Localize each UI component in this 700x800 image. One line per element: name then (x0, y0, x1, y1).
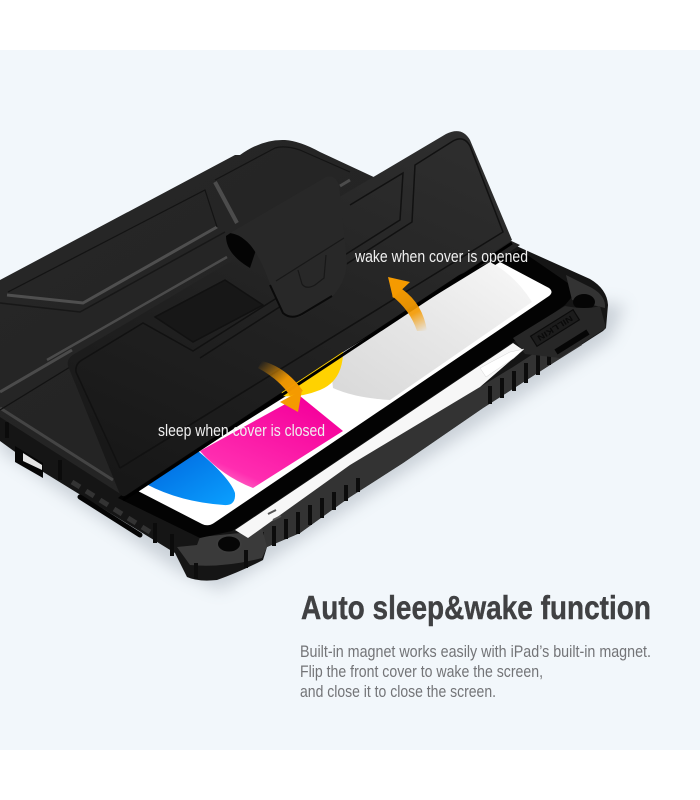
pencil bay (235, 343, 523, 538)
magenta wallpaper shape (200, 396, 343, 488)
wake arrow head (388, 277, 410, 298)
bumper corner ribs (196, 550, 246, 579)
front flap cover (68, 131, 512, 496)
back cover grooves (0, 147, 350, 480)
sleep arrow head (280, 390, 302, 412)
bumper corner, bottom (177, 528, 267, 566)
description text: Flip the front cover to wake the screen, (300, 662, 543, 681)
label: sleep when cover is closed: sleep when cover is closed (158, 421, 325, 440)
bumper lighter rim, long side (248, 333, 582, 547)
wake arrow shaft (392, 289, 427, 331)
case drop shadow (0, 300, 625, 590)
pencil band (268, 510, 281, 520)
flap embossed lines (76, 139, 503, 468)
strap fold line and notch (276, 238, 344, 287)
grey wallpaper area (330, 262, 532, 400)
USB-C port (15, 446, 43, 478)
brand plate: NILLKIN (535, 314, 574, 343)
corner hole, bottom (217, 536, 241, 552)
arrow: wake (388, 277, 427, 331)
tablet screen (136, 262, 552, 525)
rugged bumper body (0, 244, 608, 581)
sleep arrow shaft (258, 361, 303, 396)
closure strap (226, 176, 347, 318)
apple pencil tip (480, 349, 524, 377)
screen white base (136, 262, 552, 525)
back cover (0, 140, 520, 500)
USB-C port insert (23, 453, 42, 470)
blue wallpaper shape (146, 451, 235, 505)
strap lower edge (270, 285, 332, 317)
bumper ribs, long side (262, 347, 549, 554)
description text (300, 642, 651, 701)
corner detail, top right (566, 275, 605, 308)
tablet in rugged case (0, 131, 608, 581)
brand plate (531, 310, 579, 346)
label: wake when cover is opened: wake when cover is opened (354, 247, 528, 266)
description text: and close it to close the screen. (300, 682, 496, 701)
port section, top right (513, 306, 606, 358)
side switch (556, 332, 588, 352)
black bezel (118, 250, 578, 538)
strap body (230, 176, 347, 318)
arrow: sleep (258, 361, 303, 412)
side ribs and buttons (7, 422, 172, 556)
corner hole, top right (573, 294, 595, 310)
strap shadow (226, 232, 256, 268)
yellow wallpaper shape (280, 345, 343, 396)
flap edge highlight (123, 243, 512, 500)
